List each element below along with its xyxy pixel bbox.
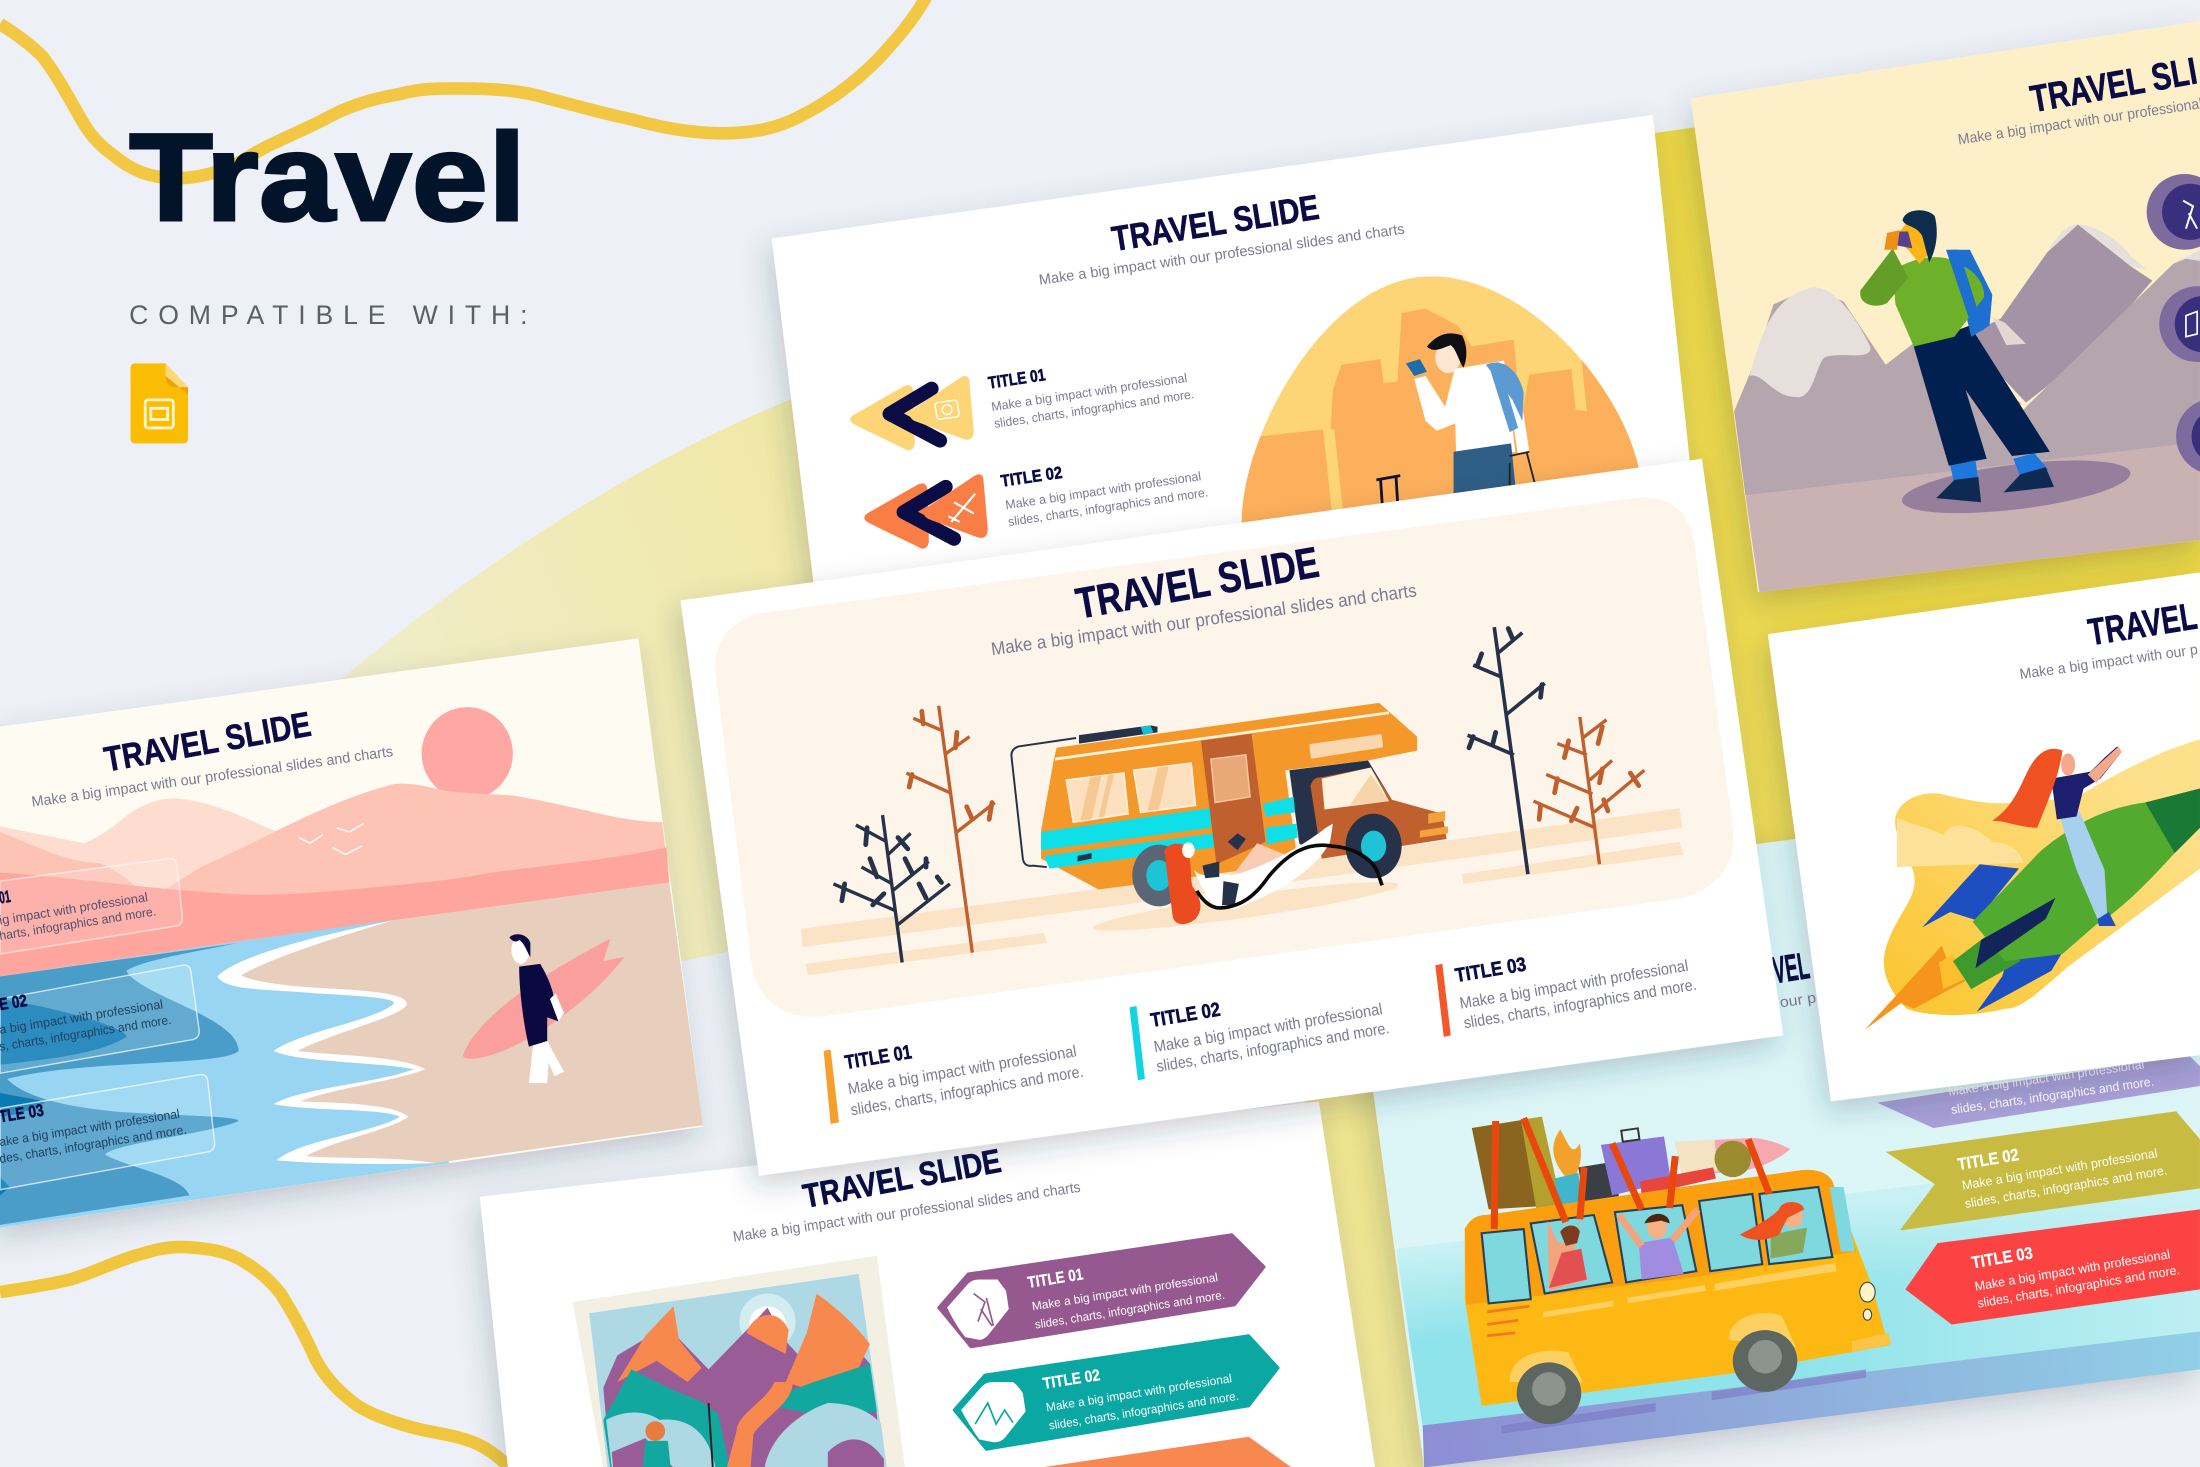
illustration: mountain poster [572, 1256, 905, 1467]
panel: slide with rocket [1768, 572, 2200, 1101]
banner: title 01 [939, 1235, 1264, 1347]
text: title 01: Make a big impact with professional [990, 371, 1188, 414]
text: title 02 [1000, 463, 1209, 529]
banner: title 03: slides, charts, infographics and more. [1976, 1263, 2181, 1311]
banner: title 03: Make a big impact with professional [1974, 1247, 2171, 1294]
illustration: darkest water [0, 999, 126, 1195]
banner: purple: slides, charts, infographics and more. [1950, 1075, 2155, 1117]
callout: title 02 [0, 965, 199, 1073]
panel: slide with poster and hexagon banners [480, 1101, 1375, 1467]
illustration: road band [1423, 1331, 2200, 1467]
banner: title 03 [1905, 1209, 2200, 1324]
text: title 02: slides, charts, infographics and more. [1007, 485, 1209, 529]
illustration: surf line [217, 920, 435, 1164]
illustration: dark tree right [1468, 627, 1545, 874]
slide heading: TRAVEL SLIDE [1109, 188, 1322, 259]
icon: camera arrows [852, 377, 972, 449]
illustration: brown tree left [906, 706, 995, 953]
item: title 01: Make a big impact with professional [847, 1042, 1078, 1098]
illustration: mountains [1734, 224, 2200, 592]
text: title 01: slides, charts, infographics and more. [993, 387, 1195, 431]
partial subtitle fragment: our p [1779, 990, 1817, 1011]
slide subtitle: Make a big impact with our professional slides and charts [1038, 222, 1406, 289]
callout: title 01: harts, infographics and more. [0, 904, 157, 943]
illustration: traveller in city [1242, 276, 1639, 523]
illustration: water [0, 919, 449, 1228]
text: title 02: Make a big impact with professional [1004, 469, 1202, 512]
callout: title 01: ig impact with professional [0, 890, 149, 928]
illustration: camper van [1011, 703, 1448, 906]
callout: title 02: a big impact with professional [0, 997, 164, 1037]
item: title 01: TITLE 01 [843, 1041, 913, 1074]
text: title 02: TITLE 02 [1000, 463, 1063, 491]
panel: slide with photographer and mountains [1691, 21, 2200, 592]
slide heading: TRAVEL SLIDE [101, 705, 314, 780]
item: title 03: slides, charts, infographics and more. [1462, 976, 1698, 1032]
icon: map badge [2159, 286, 2200, 362]
callout: title 01 [0, 858, 182, 954]
illustration: surfer [463, 934, 624, 1083]
shadow under figure [1092, 874, 1400, 939]
slide heading: TRAVEL SLIDE [1072, 539, 1322, 629]
banner: title 02 [1886, 1111, 2200, 1230]
bottom wave [0, 1247, 512, 1467]
banner: title 02: TITLE 02 [1042, 1366, 1101, 1393]
banner: title 02: slides, charts, infographics and more. [1048, 1389, 1240, 1433]
title: Travel [129, 108, 526, 247]
illustration: pink mountains [0, 784, 669, 977]
callout: title 03 [0, 1074, 215, 1190]
callout: title 02: s, charts, infographics and more. [0, 1013, 172, 1054]
ground stripes [801, 808, 1684, 975]
item: title 02: Make a big impact with professional [1152, 1000, 1384, 1056]
item: title 02: TITLE 02 [1149, 999, 1222, 1032]
illustration: sea band [1396, 1150, 2200, 1427]
illustration: birds [299, 824, 363, 854]
illustration: rocket and rider [1865, 739, 2200, 1030]
slide subtitle: Make a big impact with our professional slides and charts [31, 744, 394, 811]
banner: title 01: Make a big impact with professional [1031, 1270, 1219, 1313]
partial heading fragment: VEL [1770, 945, 1812, 992]
illustration: brown tree right [1534, 717, 1644, 864]
icon: google slides [131, 363, 188, 443]
panel: slide with bus and colored banners [1347, 786, 2200, 1467]
slide heading: TRAVEL SLIDE [800, 1143, 1004, 1216]
top wave [0, 0, 926, 178]
banner: title 03 [1031, 1437, 1294, 1467]
icon: third badge [2176, 398, 2200, 474]
slide subtitle: Make a big impact with our professional slides and charts [990, 579, 1418, 659]
callout: title 03: ake a big impact with professional [0, 1107, 181, 1149]
item: title 01 [824, 1041, 1085, 1124]
illustration: photographer [1860, 210, 2133, 523]
icon: plane arrows [866, 476, 986, 547]
item: title 02: slides, charts, infographics and more. [1155, 1019, 1391, 1076]
sea fade overlay [1796, 1150, 2200, 1382]
item: title 01: slides, charts, infographics and more. [849, 1063, 1085, 1119]
slide subtitle: Make a big impact with our professional slides and charts [732, 1180, 1082, 1246]
panel: main slide with camper van [680, 459, 1783, 1176]
illustration: sand [217, 883, 703, 1164]
content panel [715, 497, 1733, 1017]
text: title 01 [987, 365, 1195, 431]
panel: slide with surfer on beach [0, 638, 703, 1228]
item: title 03: Make a big impact with professional [1458, 957, 1690, 1013]
panel: slide with traveller and city [772, 115, 1700, 631]
banner: title 02 [954, 1336, 1278, 1449]
banner: title 02: slides, charts, infographics and more. [1964, 1163, 2168, 1211]
item: title 02 [1129, 999, 1391, 1080]
illustration: bus with luggage [1465, 1117, 1891, 1434]
banner: title 02: Make a big impact with professional [1961, 1146, 2158, 1193]
compatible with label: COMPATIBLE WITH: [129, 300, 528, 330]
banner: purple: Make a big impact with professional [1947, 1057, 2145, 1099]
banner: title 02: TITLE 02 [1956, 1145, 2020, 1174]
banner: purple [1877, 1055, 2200, 1128]
item: title 03 [1435, 954, 1698, 1037]
illustration: reclining woman [1165, 824, 1382, 924]
illustration: dark tree left [833, 815, 950, 962]
icon: hiker badge [2147, 174, 2200, 250]
banner: title 02: Make a big impact with professional [1045, 1371, 1233, 1414]
banner: title 03: TITLE 03 [1970, 1243, 2034, 1272]
item: title 03: TITLE 03 [1454, 954, 1528, 987]
illustration: deep water [0, 943, 239, 1225]
banner: title 01: TITLE 01 [1026, 1265, 1085, 1292]
banner: title 01: slides, charts, infographics and more. [1034, 1288, 1226, 1332]
text: title 01: TITLE 01 [987, 365, 1047, 393]
callout: title 03: des, charts, infographics and more. [0, 1123, 188, 1166]
illustration: sun [422, 707, 513, 800]
